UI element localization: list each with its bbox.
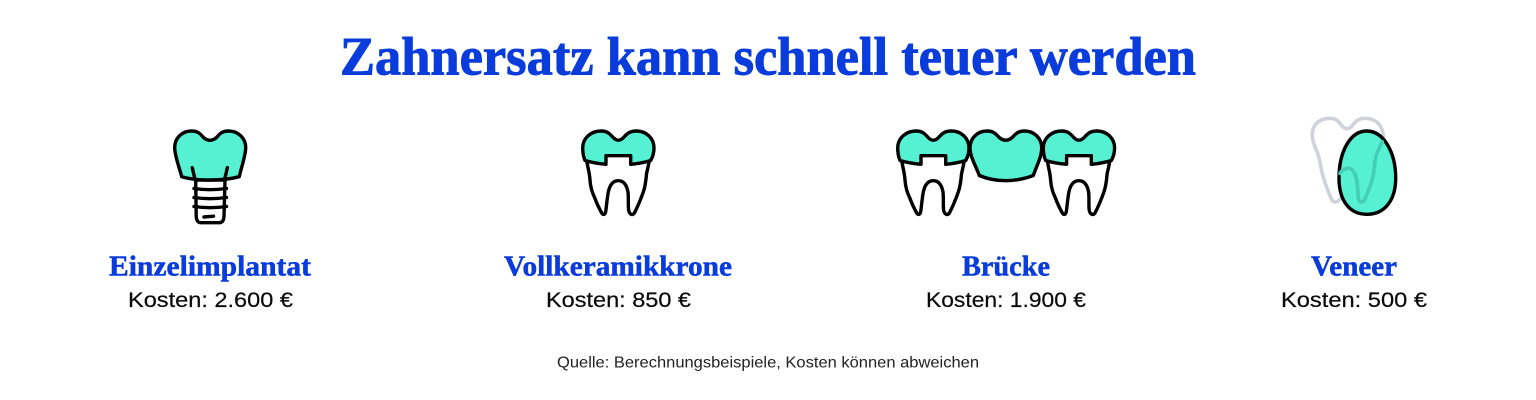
cost: 500: Kosten: 500 € (1281, 289, 1427, 312)
icon: implant (175, 131, 246, 223)
icon: crown on tooth (583, 131, 654, 214)
icon: veneer (1312, 118, 1396, 214)
panel: Brücke (898, 131, 1115, 312)
source note: Quelle: Berechnungsbeispiele, Kosten können abweichen (557, 354, 979, 372)
label: Einzelimplantat: Einzelimplantat (109, 252, 312, 282)
panel: Einzelimplantat (109, 131, 312, 312)
title: Zahnersatz kann schnell teuer werden (340, 26, 1196, 86)
cost: 1.900: Kosten: 1.900 € (926, 289, 1086, 312)
icon: bridge (898, 131, 1115, 214)
panel: Veneer (1281, 118, 1427, 312)
cost: 2.600: Kosten: 2.600 € (128, 289, 293, 312)
label: Veneer: Veneer (1311, 252, 1397, 282)
label: Vollkeramikkrone: Vollkeramikkrone (504, 252, 732, 282)
label: Brücke: Brücke (962, 252, 1050, 282)
cost: 850: Kosten: 850 € (546, 289, 691, 312)
panel: Vollkeramikkrone (504, 131, 732, 312)
